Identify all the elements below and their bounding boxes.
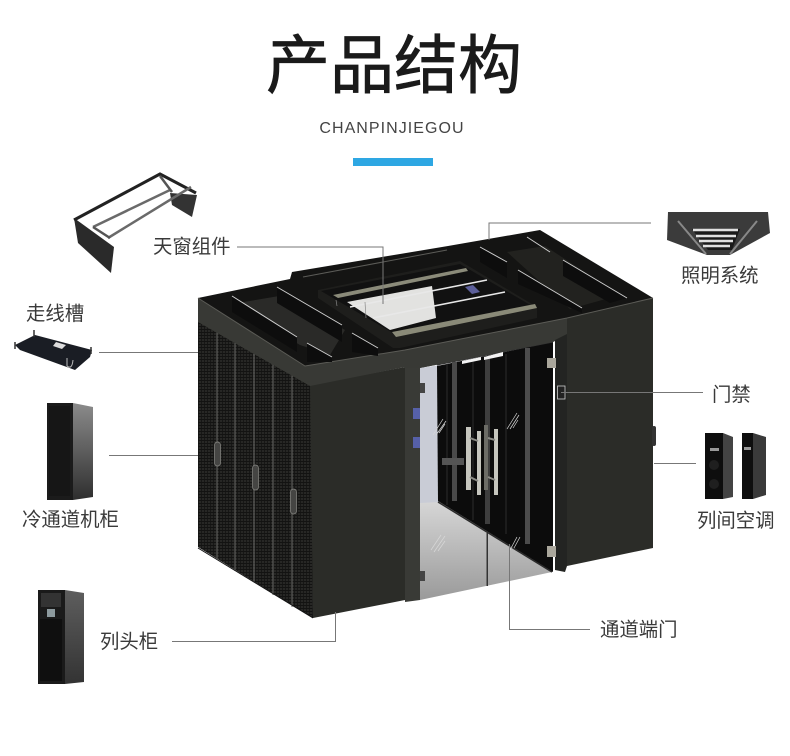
label: 列间空调: 列间空调 bbox=[697, 510, 775, 532]
label: 照明系统: 照明系统 bbox=[681, 265, 759, 287]
label: 通道端门: 通道端门 bbox=[600, 619, 678, 641]
icon: door hinges bbox=[547, 358, 556, 557]
leader line: skylight bbox=[237, 247, 383, 304]
blue accent bar bbox=[353, 158, 433, 166]
label: 走线槽: 走线槽 bbox=[26, 303, 84, 325]
leader line: lighting bbox=[489, 223, 651, 240]
icon: cable tray bbox=[15, 330, 92, 370]
panel: aisle interior bbox=[420, 342, 553, 600]
leader line: aisle end door bbox=[510, 544, 590, 630]
icon: door handles bbox=[466, 425, 498, 495]
leader line: cable tray bbox=[99, 352, 198, 354]
icon: access controller bbox=[558, 386, 565, 399]
label: 天窗组件: 天窗组件 bbox=[153, 236, 231, 258]
panel: top fascia bbox=[198, 298, 653, 386]
panel: header beam bbox=[405, 318, 567, 368]
leader line: cold aisle cabinet bbox=[109, 454, 198, 456]
panel: skylight window bbox=[318, 261, 537, 348]
panel: roof bbox=[198, 230, 653, 366]
icon: side handle bbox=[652, 426, 656, 446]
panel: roof divider walls bbox=[232, 237, 627, 362]
leader line: access control bbox=[561, 392, 703, 394]
subtitle: CHANPINJIEGOU bbox=[319, 120, 465, 137]
label: 列头柜: 列头柜 bbox=[100, 631, 158, 653]
icon: cabinet door handles bbox=[214, 442, 296, 514]
leader line: inter-row AC bbox=[654, 462, 696, 464]
label: 冷通道机柜: 冷通道机柜 bbox=[22, 509, 119, 531]
label: 门禁: 门禁 bbox=[712, 384, 751, 406]
icon: skylight assembly bbox=[74, 174, 197, 273]
panel: door post bbox=[405, 350, 420, 602]
title: 产品结构 bbox=[266, 30, 522, 102]
main aisle containment unit bbox=[198, 230, 656, 618]
icon: post labels bbox=[413, 383, 425, 581]
panel: front end cabinet bbox=[310, 367, 405, 618]
panel: right cabinet bbox=[567, 298, 653, 566]
icon: inter-row air conditioners bbox=[705, 433, 766, 499]
leader line: head cabinet bbox=[172, 612, 336, 642]
panel: right door frame bbox=[555, 334, 567, 572]
glass door reflections bbox=[431, 413, 520, 552]
icon: lighting system bbox=[667, 212, 770, 255]
icon: cold aisle cabinet bbox=[47, 403, 93, 500]
icon: head cabinet bbox=[38, 590, 84, 684]
panel: left mesh cabinet face bbox=[198, 318, 313, 618]
